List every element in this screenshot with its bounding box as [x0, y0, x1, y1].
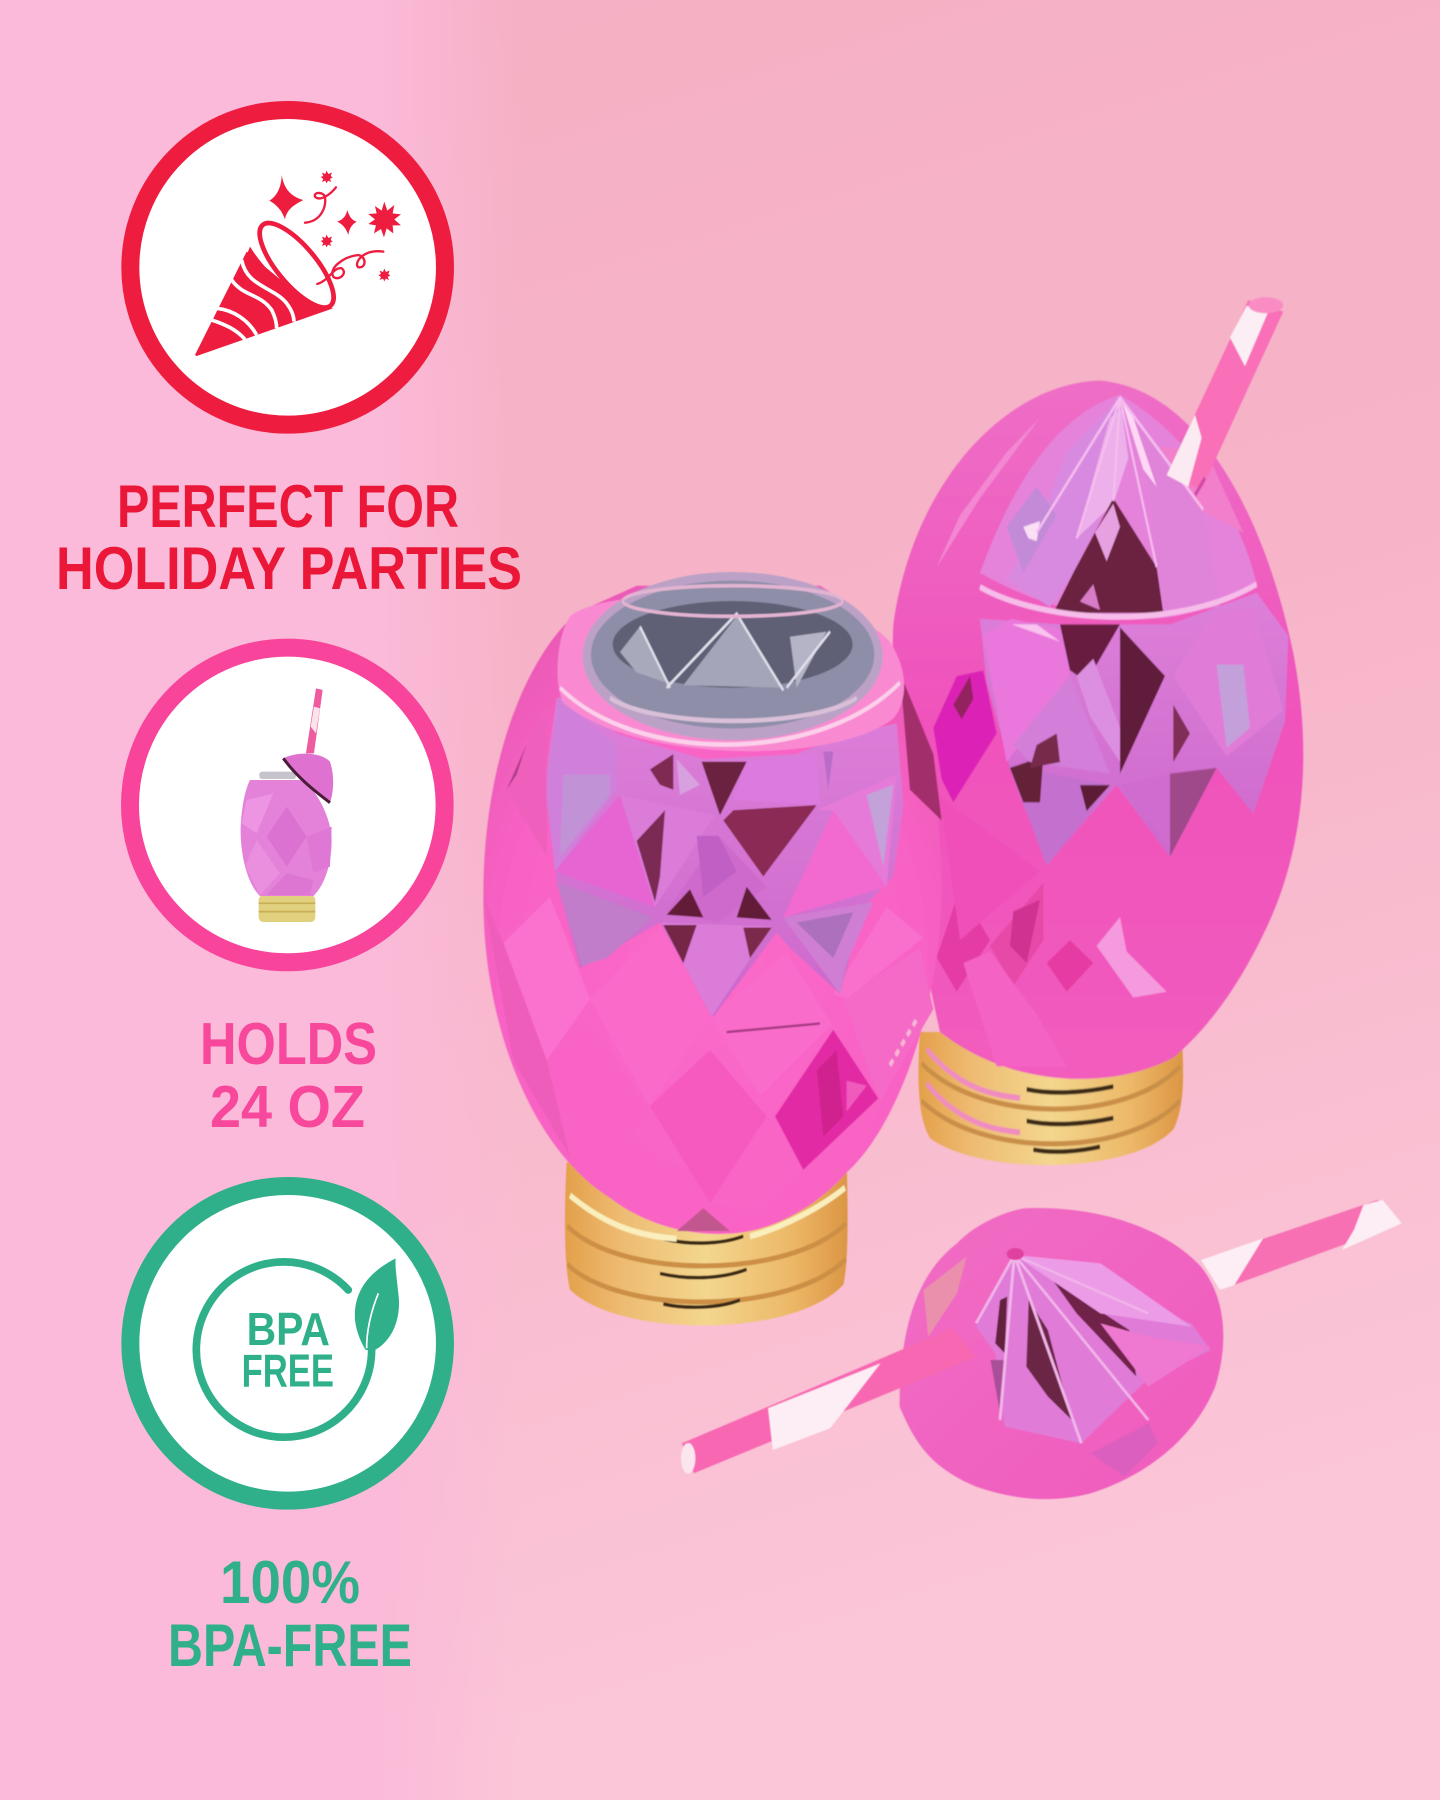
magenta reflection facets: [933, 670, 1167, 1066]
text: BPA FREE in icon: BPA: [247, 1303, 330, 1355]
left bulb tumbler: [483, 572, 942, 1326]
heading: perfect for holiday parties: PERFECT FOR: [117, 473, 459, 540]
right bulb tumbler with straw: [892, 297, 1303, 1165]
straw through lid: [681, 1328, 976, 1474]
icon: party popper badge: [130, 110, 445, 425]
magenta reflection diamond: [727, 1019, 917, 1170]
heading: perfect for holiday parties: HOLIDAY PARTIES: [56, 535, 522, 602]
mirrored upper facets: [547, 672, 942, 1017]
text: holds 24 oz: HOLDS: [200, 1011, 377, 1077]
icon: party popper cone: [195, 171, 401, 356]
text: 100% BPA-free: 100%: [220, 1549, 360, 1616]
mirrored mid facets: [980, 593, 1288, 865]
gold base of right bulb: [918, 1032, 1183, 1165]
icon: BPA free badge: [130, 1186, 445, 1501]
right bulb body: [892, 380, 1303, 1079]
left bulb body: [483, 586, 942, 1234]
lid facets: [937, 395, 1257, 619]
heading: perfect for holiday parties: [56, 473, 522, 602]
lid with straw lying on the table: [681, 1200, 1402, 1499]
text: holds 24 oz: [200, 1011, 377, 1140]
text: BPA FREE in icon: FREE: [242, 1345, 334, 1397]
gold base of left bulb: [565, 1162, 848, 1326]
lower soft facets: [483, 703, 933, 1231]
text: 100% BPA-free: BPA-FREE: [168, 1612, 412, 1679]
shoulder and glass opening: [558, 572, 904, 751]
straw in lid: [1167, 297, 1283, 495]
text: holds 24 oz: 24 OZ: [210, 1074, 365, 1140]
icon: product badge: [130, 648, 445, 962]
icon: confetti streamers: [305, 187, 383, 284]
lid dome: [900, 1208, 1223, 1499]
straw behind lid: [1201, 1200, 1402, 1290]
icon: mini bulb tumbler: [241, 688, 333, 922]
lid radial facets: [923, 1248, 1210, 1477]
text: 100% BPA-free: [168, 1549, 412, 1679]
text: BPA FREE in icon: [242, 1303, 334, 1397]
icon: leaf ring: [196, 1258, 399, 1437]
